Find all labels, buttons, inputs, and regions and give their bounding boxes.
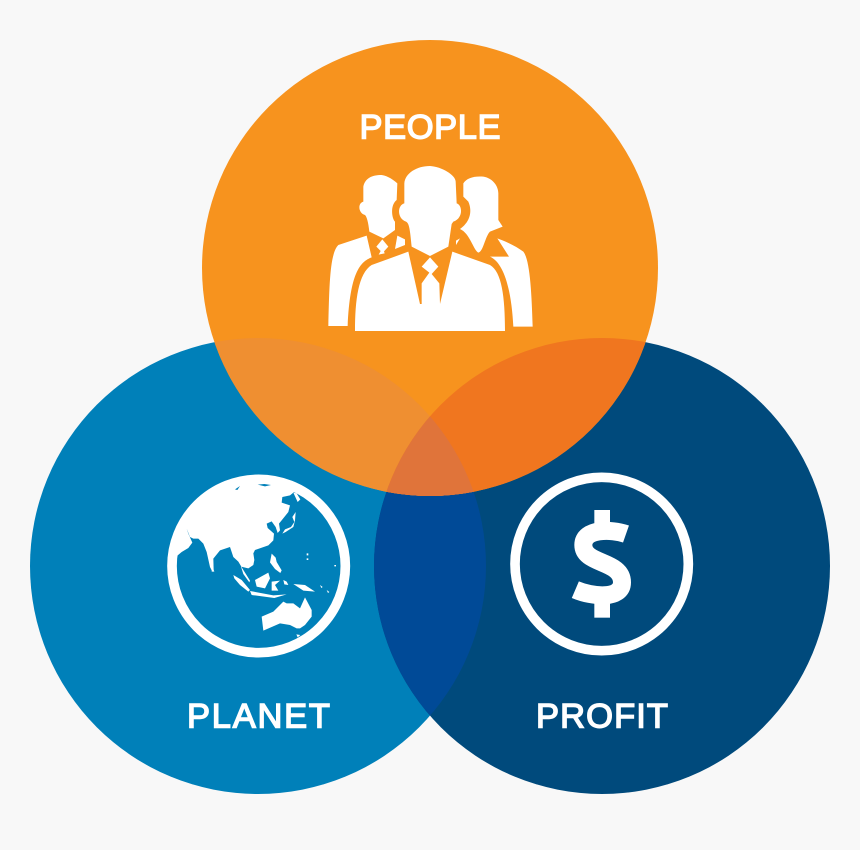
landmass: New Guinea [293,584,315,592]
dollar sign [575,510,626,618]
overlap: centre of all three [386,416,474,496]
coin ring [515,477,688,651]
small islands [212,553,336,593]
landmass: Moluccas [283,580,288,585]
circle: planet [30,338,486,794]
landmass: Sumatra [233,575,250,592]
landmass: Philippines [270,554,282,573]
inland seas at the top [235,484,271,490]
landmass: Japan [282,512,296,534]
landmass: Borneo [255,573,270,588]
overlap: planet and profit [374,492,486,716]
icon: group of business people [328,166,533,331]
circle: profit [374,338,830,794]
landmass: Australia [262,597,312,631]
landmasses [178,484,336,638]
landmass: Asia [178,484,294,582]
circle: people [202,40,658,496]
heading: planet: PLANET [187,698,330,736]
landmass: Tasmania [296,634,300,637]
icon: globe [162,465,345,653]
landmass: Sulawesi [272,581,280,591]
heading: profit: PROFIT [536,698,668,736]
heading: people: PEOPLE [360,108,500,146]
icon: dollar coin [515,477,688,651]
globe ring [172,479,345,653]
overlap: people and planet [214,338,472,496]
overlap: people and profit [388,338,646,496]
landmass: Kamchatka [293,493,300,502]
landmass: Java and Lesser Sunda [250,591,287,598]
